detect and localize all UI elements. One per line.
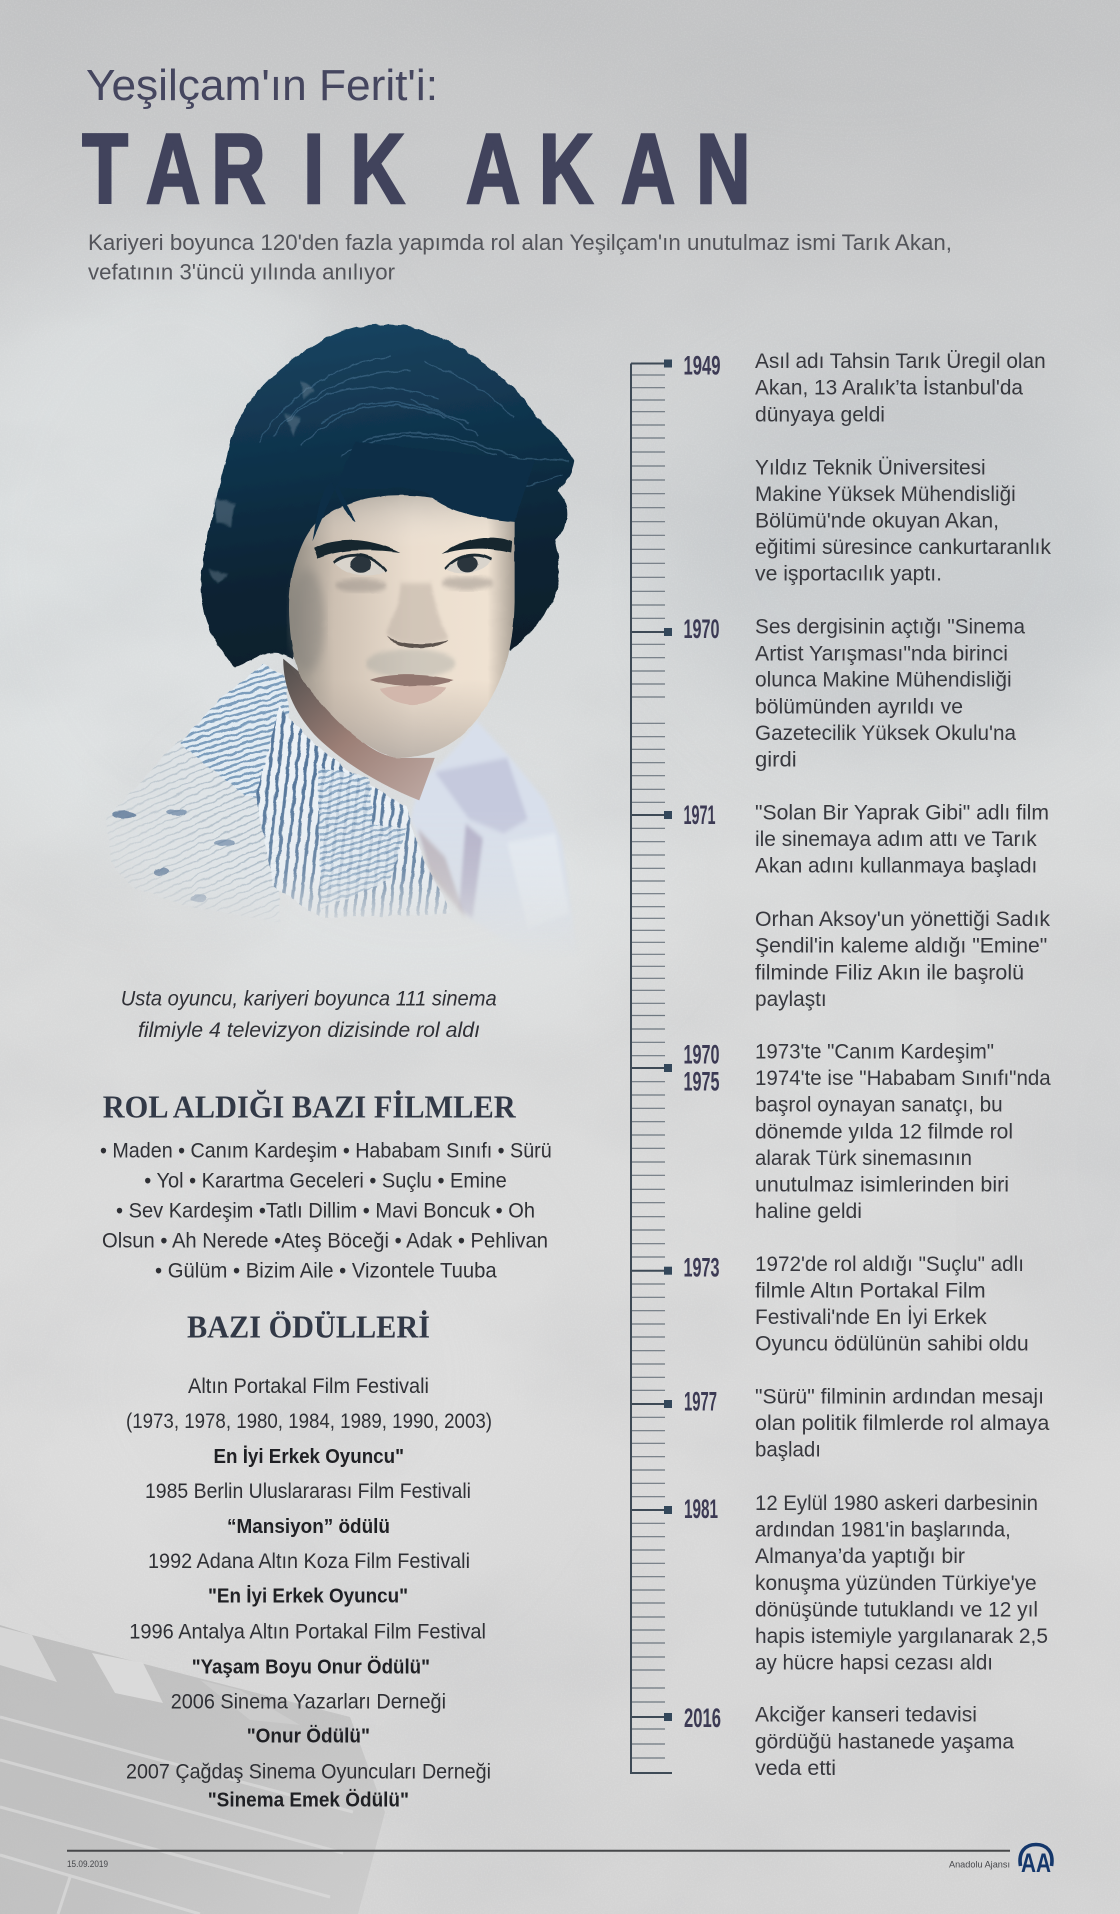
entry 1949: Asıl adı Tahsin Tarık Üregil olan bbox=[755, 350, 1046, 373]
photo caption: Usta oyuncu, kariyeri boyunca 111 sinema bbox=[121, 988, 497, 1010]
entry 1970-1975: 1974'te ise "Hababam Sınıfı"nda bbox=[755, 1067, 1051, 1090]
entry 1949: eğitimi süresince cankurtaranlık bbox=[755, 536, 1052, 559]
entry 1970: olunca Makine Mühendisliği bbox=[755, 669, 1012, 692]
entry 1949: Makine Yüksek Mühendisliği bbox=[755, 483, 1016, 506]
entry 1981 bbox=[684, 1492, 1048, 1674]
neck bbox=[283, 659, 435, 800]
awards list: 2006 Sinema Yazarları Derneği bbox=[171, 1690, 446, 1713]
name heading: TARIK AKAN bbox=[82, 113, 750, 224]
intro text: Kariyeri boyunca 120'den fazla yapımda rol alan Yeşilçam'ın unutulmaz ismi Tarık Akan, bbox=[88, 230, 952, 255]
entry 1949 bbox=[684, 350, 1052, 586]
entry 1949: Akan, 13 Aralık’ta İstanbul'da bbox=[755, 377, 1023, 400]
portrait of Tarık Akan bbox=[106, 325, 578, 958]
date: 15.09.2019 bbox=[67, 1859, 108, 1870]
films list: • Sev Kardeşim •Tatlı Dillim • Mavi Boncuk • Oh bbox=[116, 1199, 535, 1222]
footer bbox=[67, 1844, 1052, 1878]
shirt: left faded patterned sleeve bbox=[106, 663, 294, 923]
entry 1977: başladı bbox=[755, 1439, 821, 1462]
films heading: ROL ALDIĞI BAZI FİLMLER bbox=[103, 1088, 517, 1124]
entry 2016: veda etti bbox=[755, 1757, 836, 1780]
entry 1973: Oyuncu ödülünün sahibi oldu bbox=[755, 1333, 1029, 1356]
entry 1970-1975: alarak Türk sinemasının bbox=[755, 1147, 972, 1170]
entry 1970 bbox=[684, 614, 1025, 771]
awards list: "Sinema Emek Ödülü" bbox=[208, 1789, 409, 1812]
entry 1973: 1972'de rol aldığı "Suçlu" adlı bbox=[755, 1253, 1024, 1276]
entry 1949: ve işportacılık yaptı. bbox=[755, 563, 942, 586]
awards list: "Onur Ödülü" bbox=[247, 1725, 370, 1748]
awards list: 1985 Berlin Uluslararası Film Festivali bbox=[145, 1480, 471, 1503]
awards list: 1996 Antalya Altın Portakal Film Festival bbox=[129, 1620, 486, 1643]
shirt: striped collar bbox=[256, 706, 452, 918]
entry 1971: "Solan Bir Yaprak Gibi" adlı film bbox=[755, 801, 1049, 824]
entry 1949: Bölümü'nde okuyan Akan, bbox=[755, 510, 999, 533]
entry 1981: ardından 1981'in başlarında, bbox=[755, 1519, 1011, 1542]
entry 1970: 1970 bbox=[684, 614, 720, 644]
entry 1977: 1977 bbox=[684, 1387, 717, 1417]
mouth bbox=[366, 649, 455, 678]
icon: Anadolu Ajansı logo: AA bbox=[1021, 1848, 1051, 1878]
entry 1981: 1981 bbox=[684, 1494, 718, 1524]
entry 1981: dönüşünde tutuklandı ve 12 yıl bbox=[755, 1598, 1038, 1622]
entry 1970: Ses dergisinin açtığı "Sinema bbox=[755, 616, 1025, 639]
awards list: 1992 Adana Altın Koza Film Festivali bbox=[148, 1550, 470, 1573]
entry 1981: ay hücre hapsi cezası aldı bbox=[755, 1652, 993, 1674]
films list: • Maden • Canım Kardeşim • Hababam Sınıfı • Sürü bbox=[100, 1139, 552, 1162]
entry 1970: Artist Yarışması"nda birinci bbox=[755, 642, 1008, 665]
entry 1981: konuşma yüzünden Türkiye'ye bbox=[755, 1572, 1037, 1595]
awards list: "Yaşam Boyu Onur Ödülü" bbox=[192, 1655, 430, 1678]
kicker: Yeşilçam'ın Ferit'i: bbox=[86, 61, 438, 110]
entry 1970-1975: 1975 bbox=[684, 1067, 720, 1097]
entry 1970: bölümünden ayrıldı ve bbox=[755, 695, 963, 718]
awards list: Altın Portakal Film Festivali bbox=[188, 1375, 429, 1398]
entry 1949: Yıldız Teknik Üniversitesi bbox=[755, 456, 986, 479]
entry 1981: hapis istemiyle yargılanarak 2,5 bbox=[755, 1625, 1048, 1648]
entry 1977: "Sürü" filminin ardından mesajı bbox=[755, 1385, 1044, 1408]
entry 1981: 12 Eylül 1980 askeri darbesinin bbox=[755, 1492, 1038, 1515]
intro text: vefatının 3'üncü yılında anılıyor bbox=[88, 260, 395, 284]
hair bbox=[201, 325, 574, 668]
entry 1970-1975: haline geldi bbox=[755, 1200, 862, 1223]
awards list: "En İyi Erkek Oyuncu" bbox=[208, 1585, 408, 1608]
awards list bbox=[126, 1375, 492, 1812]
entry 1973: filmle Altın Portakal Film bbox=[755, 1280, 986, 1303]
entry 1973: 1973 bbox=[684, 1253, 720, 1283]
entry 1949: dünyaya geldi bbox=[755, 403, 885, 426]
eyes bbox=[333, 556, 387, 576]
entry 1977 bbox=[684, 1385, 1050, 1462]
intro text bbox=[88, 230, 952, 284]
entry 1970: Gazetecilik Yüksek Okulu'na bbox=[755, 722, 1016, 745]
films list: • Yol • Karartma Geceleri • Suçlu • Emine bbox=[144, 1169, 507, 1192]
entry 1981: Almanya’da yaptığı bir bbox=[755, 1545, 965, 1568]
entry 2016: Akciğer kanseri tedavisi bbox=[755, 1704, 977, 1727]
eyebrows bbox=[314, 540, 400, 559]
entry 2016: gördüğü hastanede yaşama bbox=[755, 1730, 1014, 1754]
entry 1949: 1949 bbox=[684, 350, 720, 380]
films list: Olsun • Ah Nerede •Ateş Böceği • Adak • Pehlivan bbox=[102, 1229, 548, 1252]
entry 1970-1975: 1973'te "Canım Kardeşim" bbox=[755, 1040, 994, 1063]
entry 1971: filminde Filiz Akın ile başrolü bbox=[755, 961, 1024, 984]
nose bbox=[386, 583, 449, 645]
awards list: En İyi Erkek Oyuncu" bbox=[214, 1445, 404, 1468]
entry 2016: 2016 bbox=[684, 1703, 721, 1733]
entry 1971: Akan adını kullanmaya başladı bbox=[755, 855, 1037, 878]
awards list: (1973, 1978, 1980, 1984, 1989, 1990, 2003) bbox=[126, 1410, 492, 1433]
clapperboard watermark bbox=[0, 1625, 385, 1914]
shirt: pale right side bbox=[409, 722, 566, 917]
entry 1971: Şendil'in kaleme aldığı "Emine" bbox=[755, 935, 1047, 958]
entry 1971: Orhan Aksoy'un yönettiği Sadık bbox=[755, 908, 1050, 931]
films list bbox=[100, 1139, 552, 1282]
fringe bbox=[312, 442, 535, 541]
entry 1970-1975 bbox=[684, 1039, 1051, 1223]
source: Anadolu Ajansı bbox=[949, 1860, 1010, 1870]
entry 2016 bbox=[684, 1703, 1014, 1780]
face bbox=[289, 442, 535, 758]
entry 1970-1975: dönemde yılda 12 filmde rol bbox=[755, 1120, 1013, 1143]
title block bbox=[82, 61, 952, 284]
entry 1971: paylaştı bbox=[755, 988, 827, 1011]
entry 1970-1975: başrol oynayan sanatçı, bu bbox=[755, 1094, 1003, 1117]
entry 1973 bbox=[684, 1253, 1029, 1356]
entry 1970-1975: unutulmaz isimlerinden biri bbox=[755, 1174, 1009, 1197]
films list: • Gülüm • Bizim Aile • Vizontele Tuuba bbox=[155, 1259, 497, 1282]
entry 1977: olan politik filmlerde rol almaya bbox=[755, 1412, 1050, 1435]
entry 1971: 1971 bbox=[684, 800, 716, 830]
photo caption: filmiyle 4 televizyon dizisinde rol aldı bbox=[138, 1019, 480, 1042]
timeline bbox=[630, 350, 1052, 1780]
timeline ruler bbox=[630, 360, 672, 1773]
entry 1970-1975: 1970 bbox=[684, 1039, 720, 1069]
awards list: 2007 Çağdaş Sinema Oyuncuları Derneği bbox=[126, 1760, 491, 1783]
entry 1973: Festivali'nde En İyi Erkek bbox=[755, 1306, 987, 1329]
entry 1971: ile sinemaya adım attı ve Tarık bbox=[755, 828, 1037, 851]
awards heading: BAZI ÖDÜLLERİ bbox=[187, 1308, 430, 1344]
photo caption bbox=[121, 988, 497, 1042]
entry 1971 bbox=[684, 800, 1050, 1011]
entry 1970: girdi bbox=[755, 748, 797, 771]
awards list: “Mansiyon” ödülü bbox=[227, 1516, 390, 1538]
